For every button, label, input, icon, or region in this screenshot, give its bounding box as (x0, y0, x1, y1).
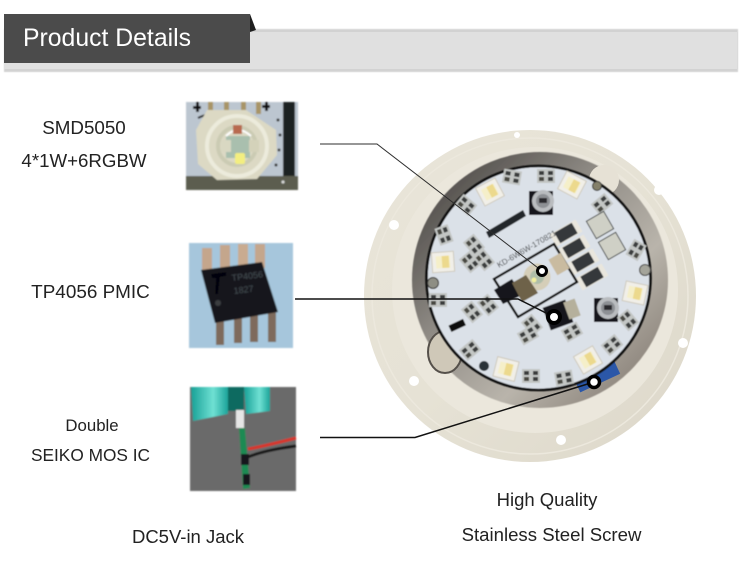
screws (428, 182, 650, 288)
label: Double SEIKO MOS IC (31, 416, 150, 465)
label: SMD5050: 4*1W+6RGBW (21, 150, 147, 171)
component clusters (429, 169, 647, 386)
label: DC5V-in Jack: DC5V-in Jack (132, 526, 245, 547)
resistors (550, 219, 608, 291)
label: SMD5050 (21, 117, 147, 171)
photo: TP4056 chip: TP4056 (231, 269, 264, 283)
leader line: MOS IC / DC jack (320, 376, 600, 438)
centre LED (524, 253, 570, 290)
leader line: SMD5050 (320, 144, 546, 276)
header tab (4, 14, 250, 63)
header bar (4, 14, 738, 72)
LED outline box (494, 244, 577, 317)
label: stainless steel screw (462, 489, 642, 545)
header pins (486, 210, 526, 238)
leader line: TP4056 (295, 299, 560, 323)
steel ring (412, 152, 668, 408)
capacitors (529, 190, 619, 322)
photo: SMD5050 LED (186, 102, 298, 190)
LEDs (431, 171, 648, 381)
power IC (543, 300, 573, 330)
label: Double SEIKO MOS IC: SEIKO MOS IC (31, 445, 150, 465)
photo: TP4056 chip: 1827 (233, 284, 254, 296)
photo: TP4056 chip (189, 243, 293, 348)
flange (364, 130, 696, 462)
label: Double SEIKO MOS IC: Double (65, 416, 119, 435)
label: stainless steel screw: Stainless Steel Screw (462, 524, 642, 545)
circuit board (426, 166, 650, 390)
label: stainless steel screw: High Quality (497, 489, 598, 510)
chip under label (494, 279, 522, 304)
photo: protection board and battery (190, 387, 296, 491)
mounting holes (389, 132, 688, 445)
board marking: KD-6W6W-170821 (496, 228, 558, 270)
blue connector (572, 356, 620, 392)
header tab fold (250, 14, 256, 32)
product photo: light module (364, 130, 696, 462)
label: SMD5050: SMD5050 (42, 117, 126, 138)
power pads (586, 211, 626, 260)
small parts (448, 319, 466, 332)
title: Product Details (23, 24, 191, 52)
label: TP4056 PMIC: TP4056 PMIC (31, 282, 150, 303)
